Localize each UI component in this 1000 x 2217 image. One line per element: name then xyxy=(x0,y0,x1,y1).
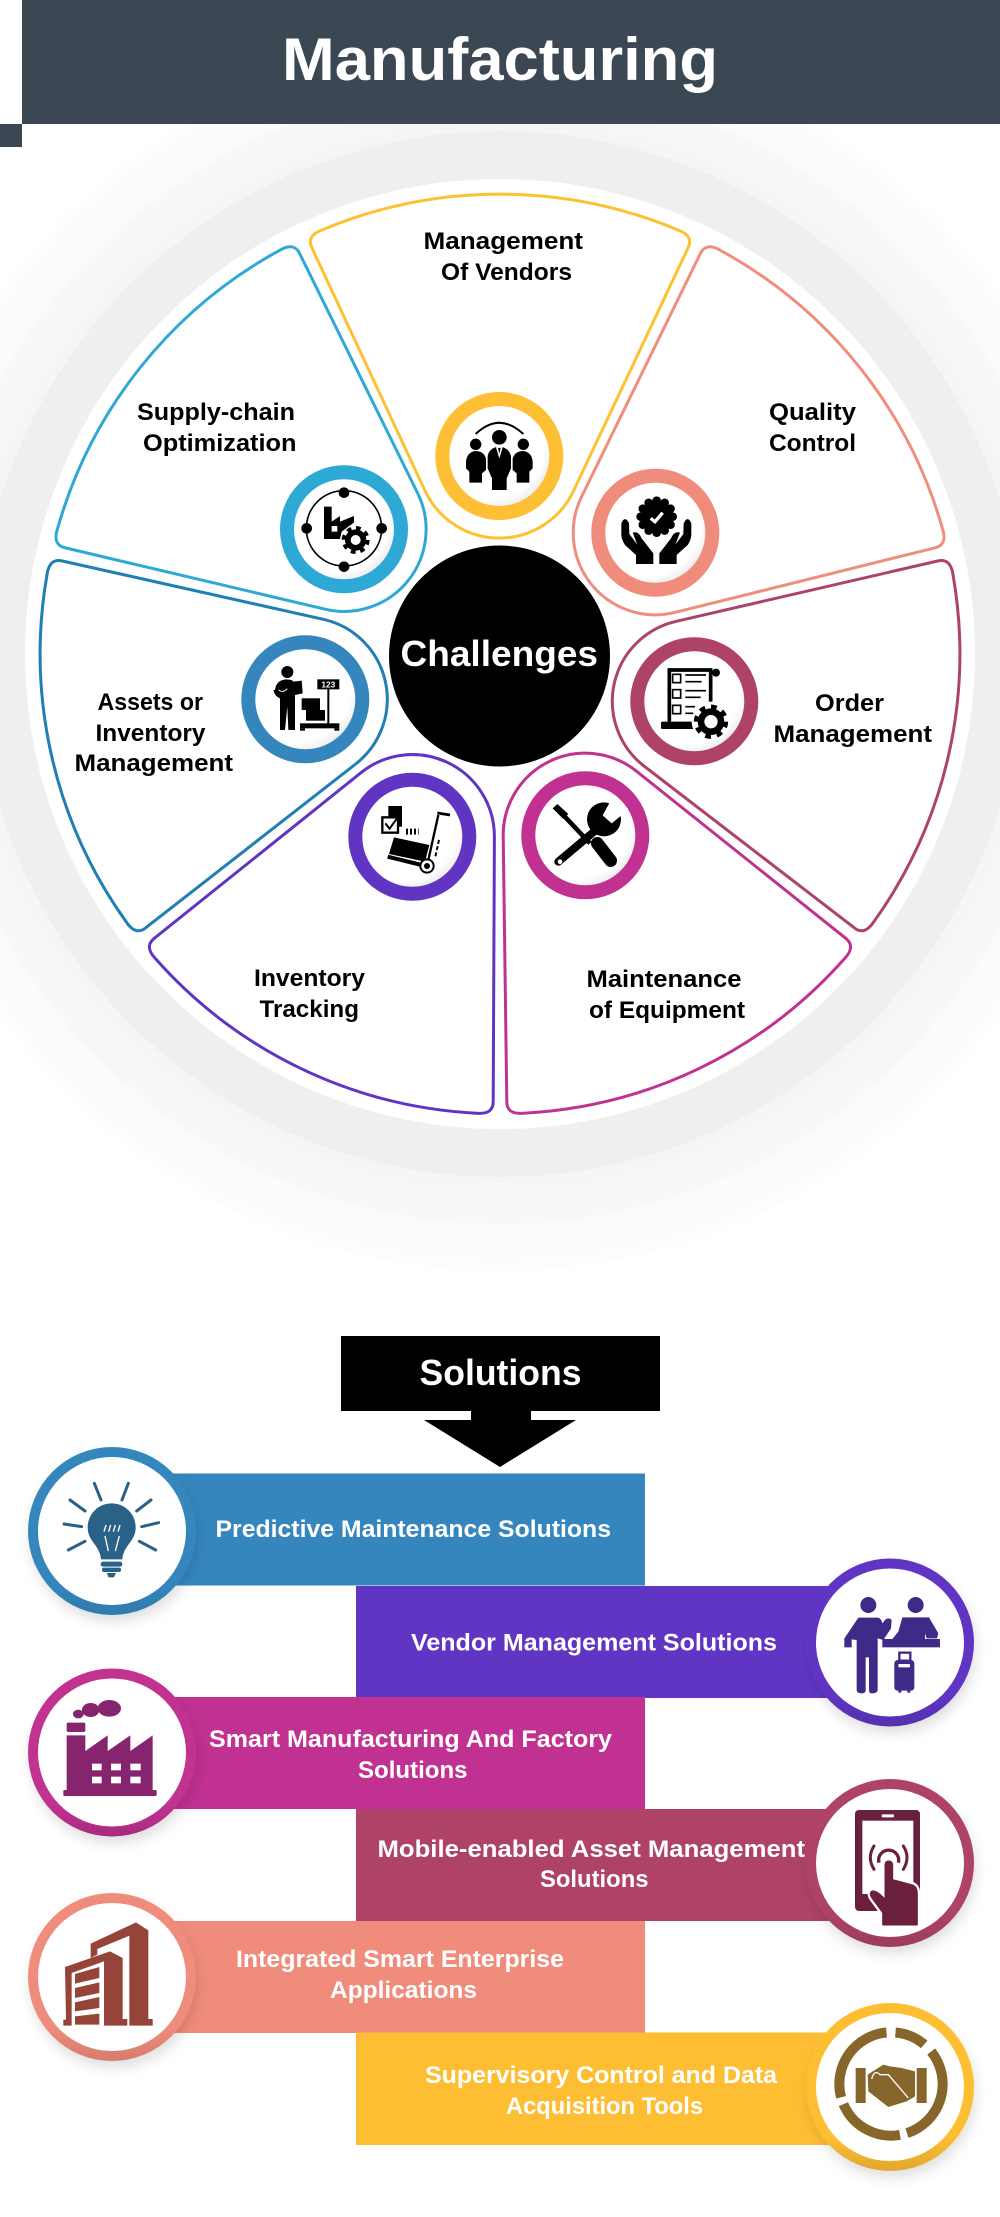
petal outline xyxy=(56,247,426,611)
icon: supply-chain factory and gear xyxy=(301,487,387,572)
heading: Solutions: Solutions xyxy=(420,1352,582,1393)
panel: Management of Vendors xyxy=(310,194,690,538)
icon: worker with scale xyxy=(273,666,339,731)
arrow down xyxy=(424,1411,576,1467)
label: Smart Manufacturing And Factory xyxy=(209,1726,613,1753)
bar xyxy=(356,1809,890,1921)
label: Solutions xyxy=(358,1757,468,1784)
center circle: Challenges xyxy=(389,546,610,766)
header banner xyxy=(0,0,1000,147)
bar xyxy=(110,1921,645,2033)
icon: inventory trolley xyxy=(382,806,450,873)
icon: order checklist with gear xyxy=(661,669,730,741)
label xyxy=(74,689,233,777)
label xyxy=(425,2062,778,2120)
label: Control xyxy=(769,430,856,457)
title: Manufacturing xyxy=(282,26,718,93)
badge circle xyxy=(806,1558,974,1726)
icon: handshake in segmented ring xyxy=(839,2033,943,2136)
solution: Mobile-enabled Asset Management Solutions xyxy=(356,1779,974,1947)
label: Maintenance xyxy=(586,966,742,993)
bar xyxy=(356,2032,890,2145)
panel: challenges wheel background rings xyxy=(0,37,1000,1271)
petal outline xyxy=(310,194,690,538)
panel: Quality Control xyxy=(573,247,944,615)
icon: vendor team xyxy=(466,423,533,490)
label: Integrated Smart Enterprise xyxy=(236,1946,564,1973)
icon: wrench and screwdriver xyxy=(553,801,628,864)
panel: Maintenance of Equipment xyxy=(503,753,851,1113)
badge circle xyxy=(28,1668,196,1836)
bar xyxy=(110,1474,645,1586)
label xyxy=(769,399,857,457)
petal outline xyxy=(573,247,944,615)
solution: Smart Manufacturing And Factory Solutions xyxy=(28,1668,645,1836)
petal outline xyxy=(612,561,960,931)
solution: Supervisory Control and Data Acquisition Tools xyxy=(356,2003,974,2171)
label xyxy=(774,690,932,748)
icon: worker with scale: 123 xyxy=(321,679,336,689)
panel: Order Management xyxy=(612,561,960,931)
label: Vendor Management Solutions xyxy=(411,1630,777,1656)
panel: Inventory Tracking xyxy=(149,755,494,1113)
icon: office buildings xyxy=(63,1922,153,2026)
label xyxy=(424,228,583,286)
label: Supervisory Control and Data xyxy=(425,2062,778,2089)
badge circle xyxy=(28,1893,196,2061)
bar xyxy=(356,1586,890,1698)
solution: Integrated Smart Enterprise Applications xyxy=(28,1893,645,2061)
icon: factory xyxy=(63,1700,157,1796)
label: Predictive Maintenance Solutions xyxy=(216,1516,611,1543)
label xyxy=(378,1836,805,1893)
label: Mobile-enabled Asset Management xyxy=(378,1836,805,1863)
label: Quality xyxy=(769,399,857,426)
icon ring xyxy=(287,472,401,586)
label: Supply-chain xyxy=(137,399,295,426)
label: of Equipment xyxy=(589,997,745,1024)
label: Tracking xyxy=(260,996,359,1023)
label: Management xyxy=(774,721,932,748)
label xyxy=(209,1726,613,1784)
icon: light bulb xyxy=(64,1483,159,1577)
label: Of Vendors xyxy=(441,259,572,286)
label: Solutions xyxy=(540,1866,648,1893)
label: Assets or xyxy=(98,689,203,716)
icon: vendor desk and traveller xyxy=(844,1597,940,1693)
badge circle xyxy=(806,2003,974,2171)
icon ring xyxy=(598,476,712,590)
badge circle xyxy=(806,1779,974,1947)
label: Order xyxy=(815,690,884,717)
icon ring xyxy=(355,780,469,894)
center circle: Challenges: Challenges xyxy=(400,633,598,674)
label: Optimization xyxy=(143,430,296,457)
solution: Vendor Management Solutions xyxy=(356,1558,974,1726)
icon: phone and touching hand xyxy=(855,1810,920,1927)
label: Applications xyxy=(330,1977,477,2004)
petal outline xyxy=(149,755,494,1113)
label: Management xyxy=(424,228,583,255)
icon ring xyxy=(637,644,751,758)
petal outline xyxy=(40,561,387,931)
petal outline xyxy=(503,753,851,1113)
icon ring xyxy=(248,642,362,756)
label: Acquisition Tools xyxy=(506,2093,703,2120)
label xyxy=(137,399,296,457)
label: Inventory xyxy=(254,965,366,992)
label xyxy=(586,966,745,1024)
panel: Supply-chain Optimization xyxy=(56,247,426,611)
label xyxy=(236,1946,564,2004)
label: Inventory xyxy=(96,720,206,747)
icon ring xyxy=(442,399,556,513)
bar xyxy=(110,1697,645,1809)
label xyxy=(254,965,366,1023)
icon: quality badge in hands xyxy=(621,496,691,564)
solution: Predictive Maintenance Solutions xyxy=(28,1447,645,1615)
label: Management xyxy=(74,750,233,777)
heading: Solutions xyxy=(341,1336,660,1411)
panel: Assets or Inventory Management xyxy=(40,561,387,931)
icon ring xyxy=(528,778,642,892)
badge circle xyxy=(28,1447,196,1615)
